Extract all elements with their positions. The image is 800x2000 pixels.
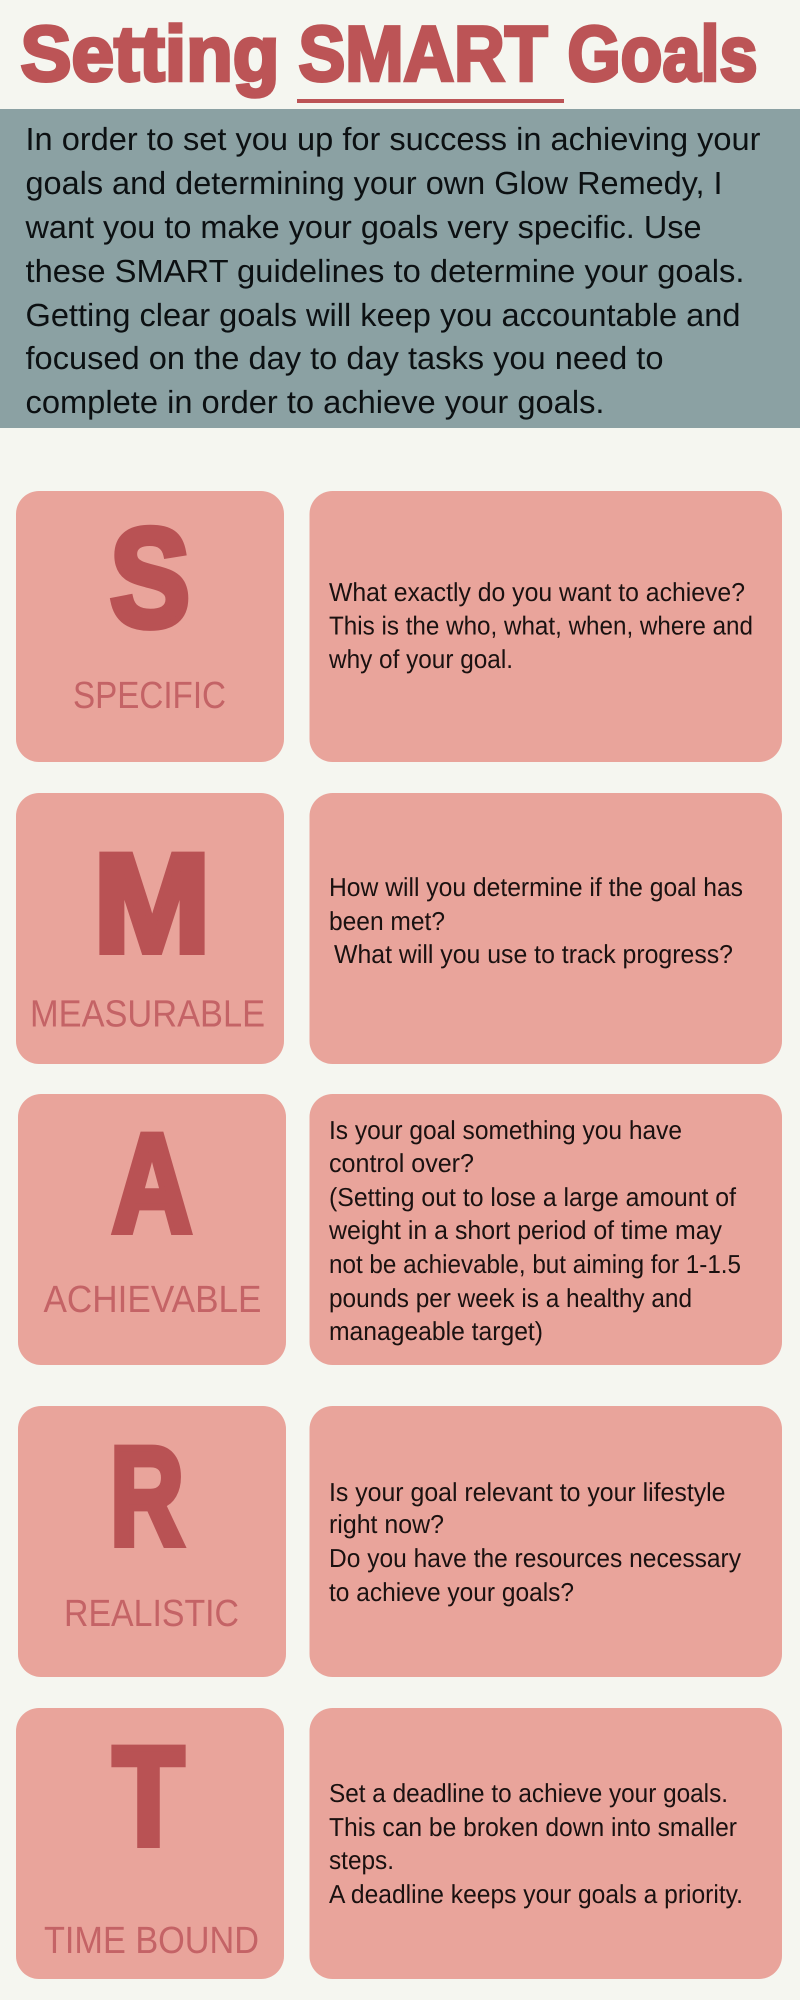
panel: R realistic: [18, 1406, 286, 1677]
panel: introduction: [0, 109, 800, 428]
label: time bound: TIME BOUND: [44, 1920, 259, 1962]
description text: [328, 577, 753, 674]
letter T: T: [113, 1718, 184, 1874]
description text: weight in a short period of time may: [328, 1215, 722, 1245]
letter S: S: [110, 499, 190, 656]
intro text: Getting clear goals will keep you accountable and: [26, 297, 740, 333]
description text: Set a deadline to achieve your goals.: [329, 1778, 728, 1808]
panel: R description: [310, 1406, 782, 1677]
panel: M description: [310, 793, 782, 1064]
description text: to achieve your goals?: [329, 1577, 574, 1607]
description text: This can be broken down into smaller: [329, 1812, 737, 1842]
description text: pounds per week is a healthy and: [329, 1283, 692, 1313]
letter R: R: [110, 1418, 184, 1574]
description text: Do you have the resources necessary: [329, 1543, 741, 1573]
label: measurable: MEASURABLE: [30, 994, 265, 1036]
description text: [328, 1115, 741, 1346]
intro text: focused on the day to day tasks you need to: [26, 340, 664, 376]
description text: What exactly do you want to achieve?: [329, 577, 745, 607]
intro text: In order to set you up for success in achieving your: [26, 121, 761, 157]
panel: A achievable: [18, 1094, 286, 1365]
title: Goals: [568, 10, 758, 98]
label: specific: SPECIFIC: [73, 675, 226, 717]
title underline: [297, 99, 564, 103]
panel: A description: [310, 1094, 782, 1365]
title: SMART: [298, 10, 548, 98]
description text: [329, 1778, 743, 1909]
intro text: complete in order to achieve your goals.: [26, 384, 604, 420]
description text: Is your goal relevant to your lifestyle: [329, 1477, 726, 1507]
panel: T time bound: [16, 1708, 284, 1979]
description text: This is the who, what, when, where and: [329, 611, 753, 641]
panel: T description: [310, 1708, 782, 1979]
label: realistic: REALISTIC: [64, 1593, 239, 1635]
description text: Is your goal something you have: [329, 1115, 682, 1145]
description text: How will you determine if the goal has: [329, 872, 743, 902]
description text: A deadline keeps your goals a priority.: [329, 1879, 743, 1909]
intro text: want you to make your goals very specific. Use: [24, 209, 701, 245]
title: [20, 10, 758, 98]
description text: manageable target): [329, 1316, 543, 1346]
letter M: M: [94, 824, 210, 982]
description text: control over?: [329, 1148, 474, 1178]
intro text: these SMART guidelines to determine your goals.: [26, 253, 744, 289]
label: achievable: ACHIEVABLE: [44, 1279, 262, 1321]
description text: right now?: [329, 1509, 444, 1539]
panel: M measurable: [16, 793, 284, 1064]
description text: What will you use to track progress?: [334, 939, 733, 969]
description text: steps.: [329, 1845, 394, 1875]
letter A: A: [112, 1104, 192, 1262]
panel: S specific: [16, 491, 284, 762]
title: Setting: [20, 10, 280, 98]
description text: why of your goal.: [328, 644, 513, 674]
description text: [329, 1477, 741, 1607]
panel: S description: [310, 491, 782, 762]
intro text: goals and determining your own Glow Remedy, I: [26, 165, 722, 201]
intro text: [24, 121, 761, 420]
description text: [329, 872, 743, 969]
description text: not be achievable, but aiming for 1-1.5: [329, 1249, 741, 1279]
description text: (Setting out to lose a large amount of: [329, 1182, 737, 1212]
description text: been met?: [329, 906, 445, 936]
